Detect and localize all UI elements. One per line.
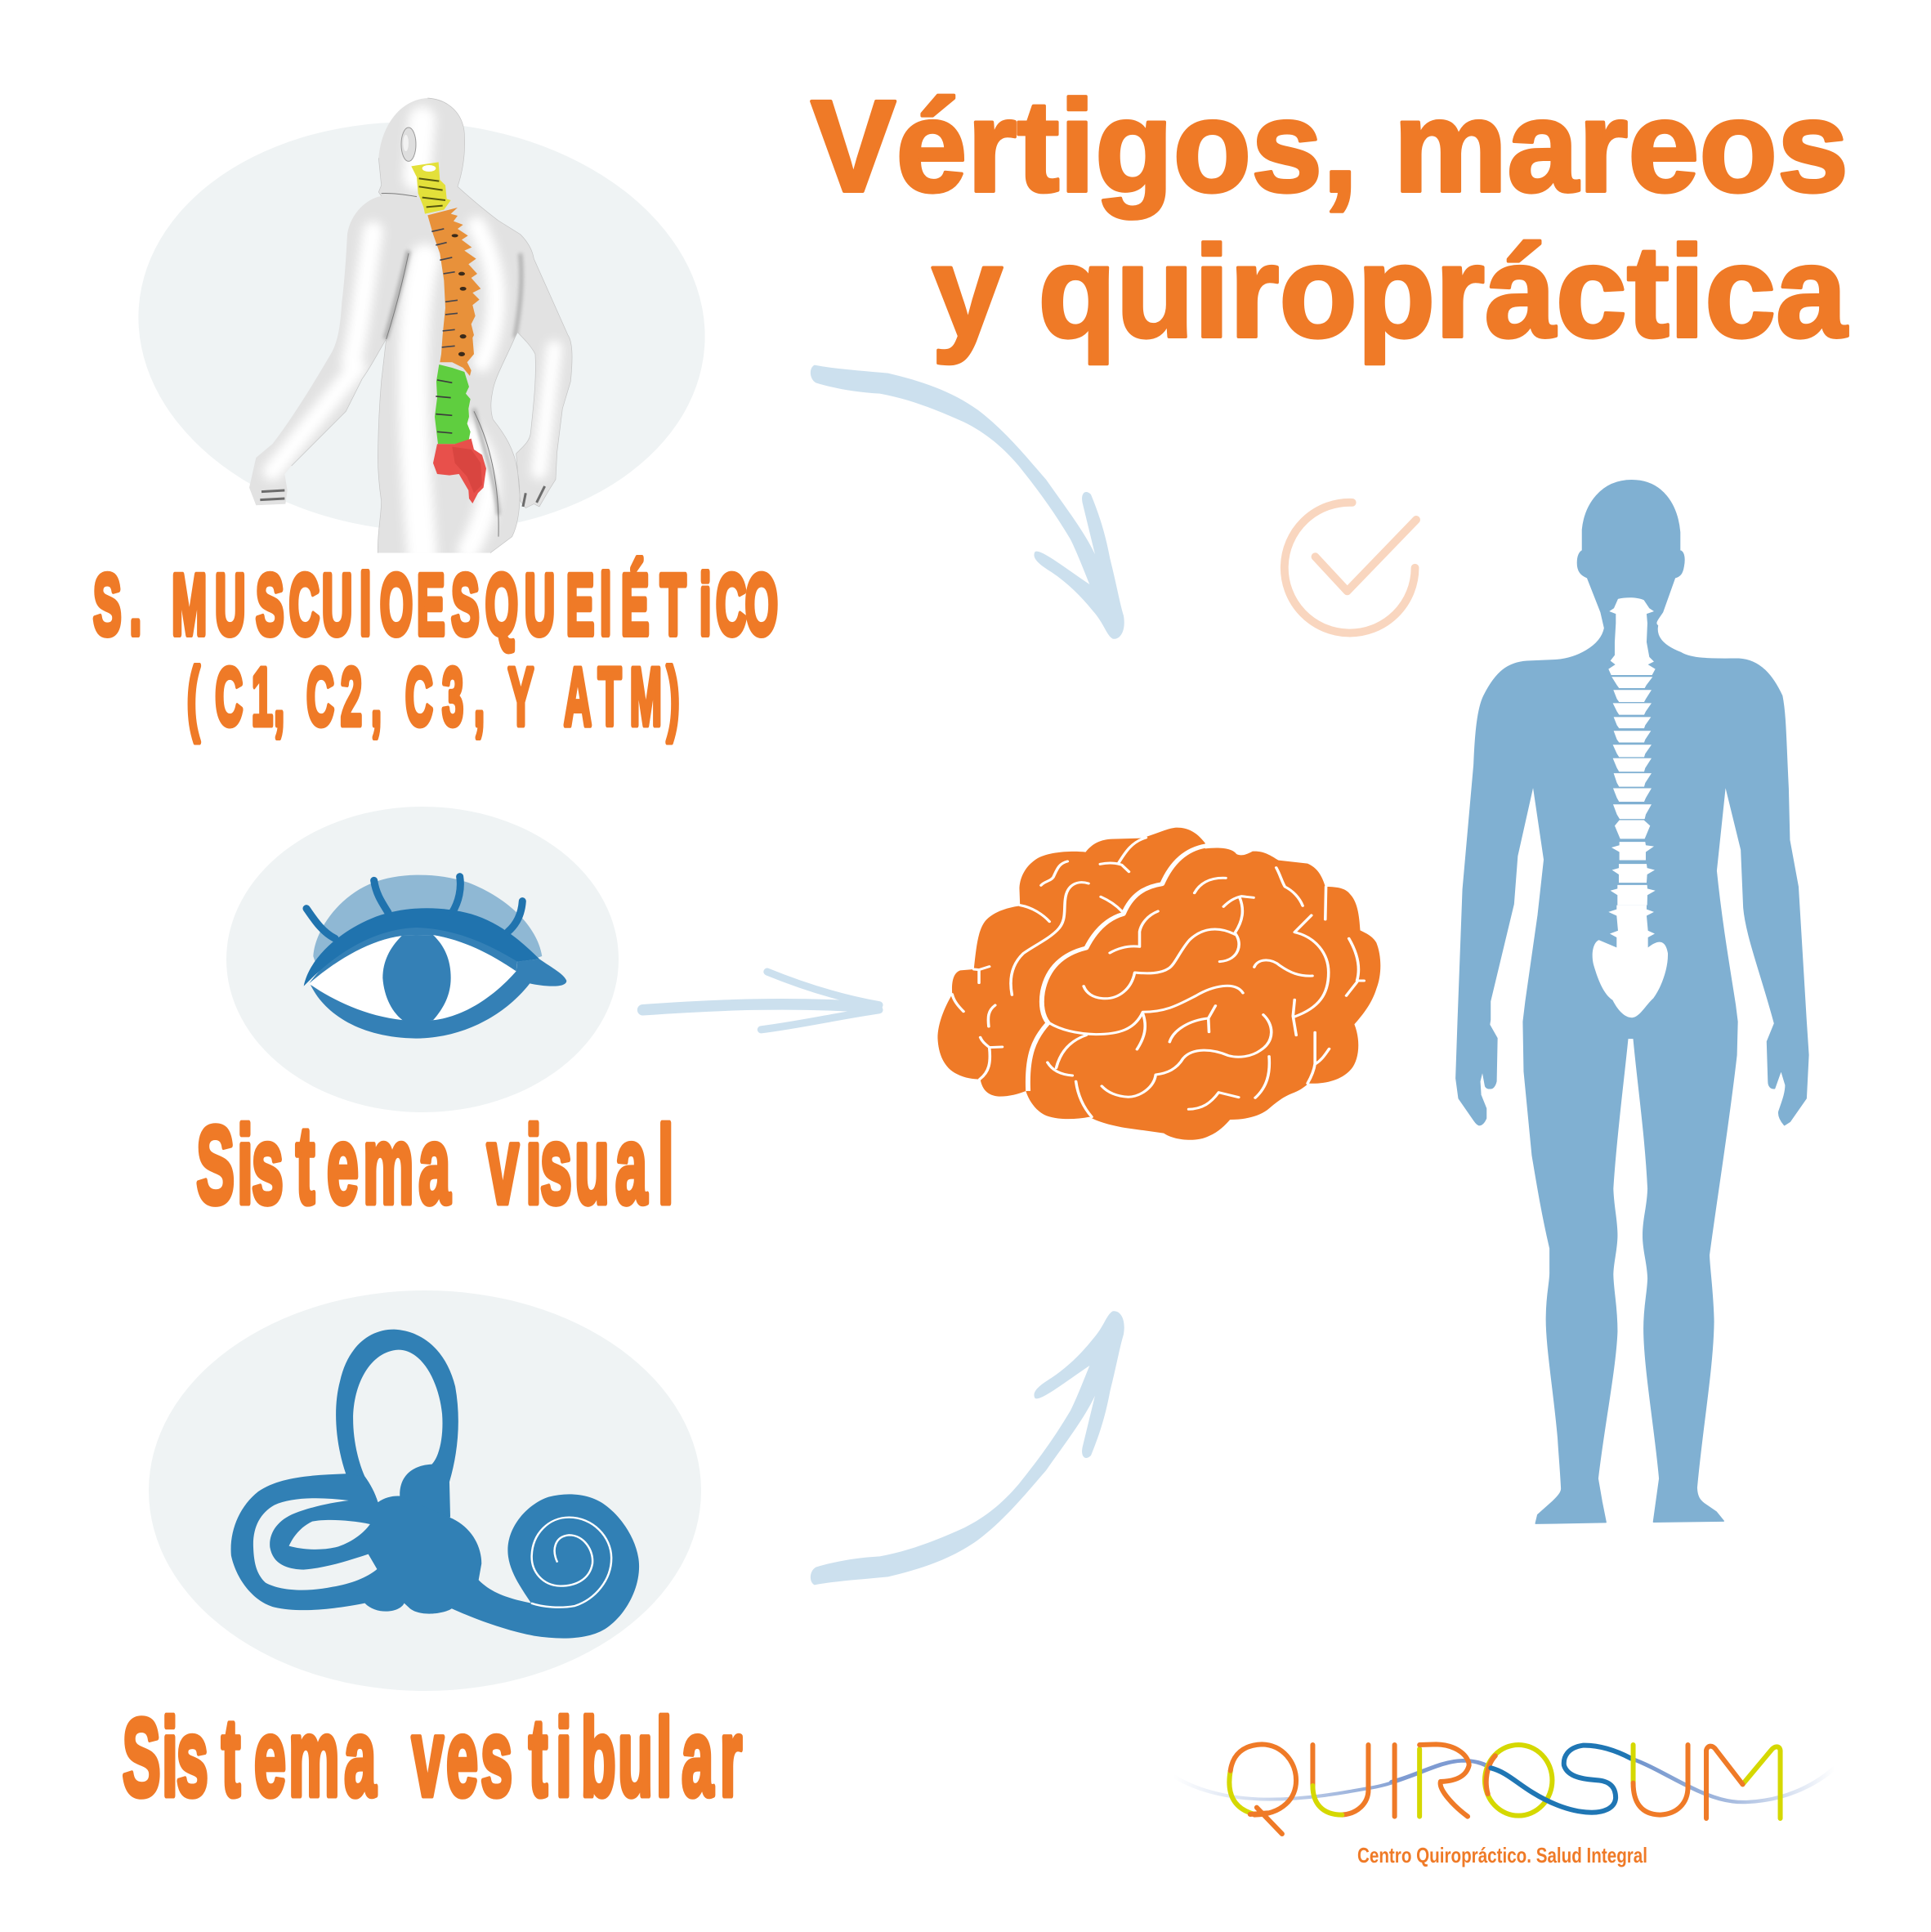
arrow: musculoskeletal to brain xyxy=(811,365,1124,639)
logo wordmark xyxy=(1173,1744,1835,1834)
logo: Quirosum xyxy=(1173,1744,1835,1867)
label: musculoskeletal system: S. MUSCUlOESQUElÉTiCO xyxy=(93,557,778,653)
panel: musculoskeletal system xyxy=(124,90,719,558)
illustration: human back with coloured spine xyxy=(249,98,572,553)
background ellipse: musculoskeletal xyxy=(124,103,719,551)
icon: brain xyxy=(937,828,1380,1140)
label: visual system: Sistema visual xyxy=(196,1103,673,1227)
label: vestibular system: Sistema vestibular xyxy=(123,1696,742,1819)
background ellipse: visual xyxy=(226,807,619,1112)
arrow: vestibular to brain xyxy=(811,1311,1124,1585)
white spine xyxy=(1593,597,1668,1017)
icon: eye xyxy=(304,875,566,1039)
panel: vestibular system xyxy=(149,1290,701,1691)
figure: human silhouette with spine xyxy=(1456,481,1808,1523)
label: musculoskeletal system xyxy=(93,557,778,743)
title xyxy=(811,73,1848,364)
title: Vértigos, mareos xyxy=(811,73,1848,219)
logo tagline: Centro Quiropráctico. Salud Integral xyxy=(1357,1843,1647,1867)
icon: check mark xyxy=(1285,503,1416,633)
background ellipse: vestibular xyxy=(149,1290,701,1691)
arrow: visual to brain xyxy=(643,972,879,1030)
silhouette xyxy=(1456,481,1808,1523)
label: musculoskeletal system: (C1, C2, C3, Y ATM) xyxy=(187,651,680,743)
icon: inner ear xyxy=(231,1330,639,1639)
panel: visual system xyxy=(226,807,619,1112)
title: y quiropráctica xyxy=(932,218,1848,364)
